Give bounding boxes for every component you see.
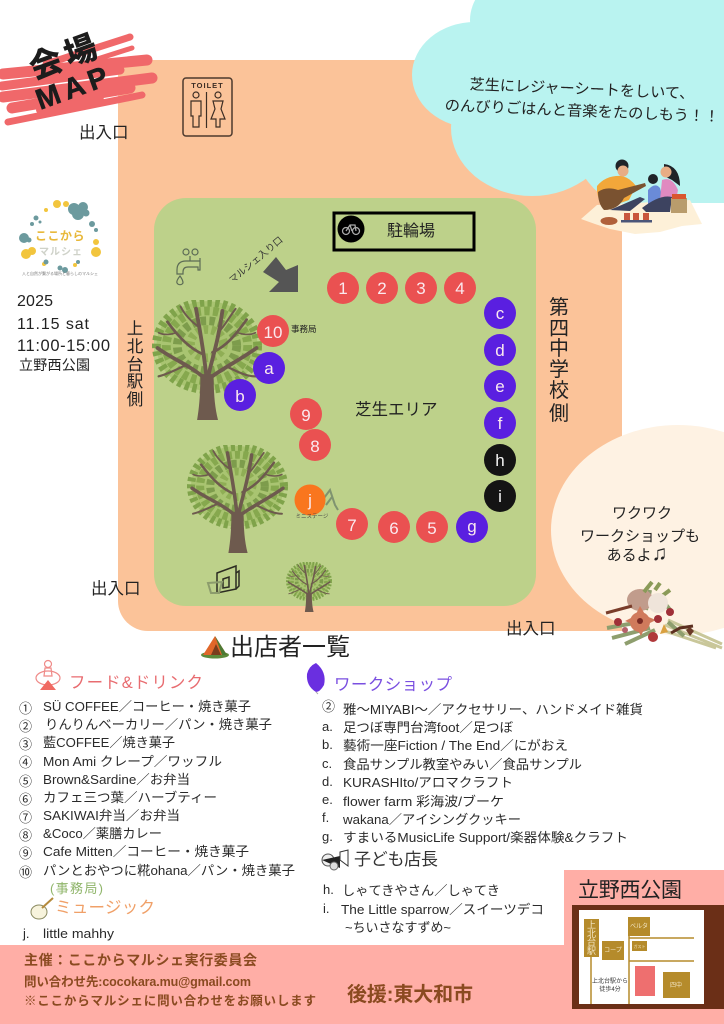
tree 1: [156, 301, 258, 420]
info bubble background: [551, 425, 724, 635]
food stall markers: 7: [347, 516, 357, 535]
logo: ここからマルシェ: 人と自然が繋がる場所と暮らしのマルシェ: [22, 270, 98, 276]
supporter: 後援:東大和市: [347, 983, 473, 1006]
map blocks: [584, 917, 690, 998]
workshop rows: KURASHIto/アロマクラフト: [343, 775, 513, 790]
info bubble text: あるよ♫: [607, 542, 667, 565]
icon: basketball hoop: [208, 566, 239, 593]
label: entrance top left: 出入口: [79, 123, 128, 142]
illustration: dried flower bouquet: [606, 582, 722, 648]
map labels: 駅: [587, 946, 596, 956]
icon: guitar: [31, 898, 53, 919]
workshop rows: c.: [322, 756, 332, 771]
tree 2: [191, 446, 284, 553]
heading: music: ミュージック: [55, 898, 155, 917]
organiser info: 主催：ここからマルシェ実行委員会: [24, 952, 257, 968]
panel: kids shop: i.: [323, 901, 330, 916]
panel: music: j.: [22, 926, 30, 941]
map labels: 台: [587, 936, 596, 947]
label: office: 事務局: [291, 324, 317, 334]
kids shop markers: h: [495, 451, 505, 470]
panel: food and drink: [19, 660, 295, 896]
vertical label: 上北台駅側: 駅: [127, 373, 143, 391]
logo: ここからマルシェ: [19, 200, 101, 276]
workshop rows: ②: [322, 699, 335, 714]
icon: toilet sign: [183, 78, 232, 136]
red brush strokes: [2, 37, 152, 122]
icon: purple leaf: [307, 663, 325, 694]
workshop rows: [322, 699, 643, 845]
event details: 2025: [17, 293, 53, 310]
food vendor rows: ③: [19, 737, 32, 752]
workshop rows: e.: [322, 792, 333, 807]
food stall markers: 6: [389, 519, 399, 538]
heading: kids shop: 子ども店長: [354, 850, 438, 869]
food stall markers: [257, 272, 476, 543]
title: 会場MAP with red brush: [2, 27, 152, 122]
food stall markers: 4: [455, 279, 465, 298]
panel: kids shop: ~ちいさなすずめ~: [345, 920, 451, 935]
panel: workshops: [307, 663, 643, 845]
workshop rows: 食品サンプル教室やみい／食品サンプル: [343, 757, 582, 772]
music marker: mini stage: j: [307, 491, 312, 510]
workshop markers: [224, 297, 516, 543]
food vendor rows: カフェ三つ葉／ハーブティー: [43, 790, 217, 805]
map labels: 徒歩4分: [599, 985, 621, 993]
panel: kids shop: The Little sparrow／スイーツデコ: [341, 902, 544, 917]
food vendor rows: [19, 699, 295, 896]
logo: ここからマルシェ: ここから: [35, 229, 85, 243]
title text: MAP: [32, 59, 117, 117]
organiser info: 問い合わせ先:cocokara.mu@gmail.com: [24, 974, 251, 989]
footer band: [0, 870, 724, 1024]
vertical label: 上北台駅側: 台: [127, 355, 143, 374]
workshop markers: d: [495, 341, 505, 360]
music marker: mini stage: [294, 484, 338, 520]
food stall markers: 5: [427, 519, 437, 538]
workshop markers: f: [498, 414, 503, 433]
food vendor rows: ⑤: [19, 774, 32, 789]
food vendor rows: ①: [19, 701, 32, 716]
arrow: entrance direction: [263, 257, 298, 292]
panel: music: little mahhy: [43, 926, 115, 941]
workshop rows: 雅～MIYABI～／アクセサリー、ハンドメイド雑貨: [343, 702, 643, 717]
organiser info: ※ここからマルシェに問い合わせをお願いします: [24, 993, 316, 1008]
heading: vendor list: 出店者一覧: [230, 634, 350, 661]
workshop markers: e: [495, 377, 505, 396]
food vendor rows: パンとおやつに糀ohana／パン・焼き菓子: [43, 863, 295, 878]
food vendor rows: Brown&Sardine／お弁当: [43, 772, 190, 787]
food stall markers: 3: [416, 279, 426, 298]
food vendor rows: りんりんベーカリー／パン・焼き菓子: [45, 717, 272, 732]
title text: 会場: [25, 27, 106, 86]
vertical label: 第四中学校側: 校: [549, 379, 569, 402]
vertical label: 第四中学校側: 学: [549, 358, 569, 381]
illustration: family picnic: [581, 160, 702, 234]
map park block: [635, 966, 655, 996]
food stall markers: 1: [338, 279, 348, 298]
food vendor rows: ②: [19, 719, 32, 734]
map title: 立野西公園: [578, 879, 682, 902]
workshop markers: g: [467, 517, 477, 536]
organiser info: [24, 952, 316, 1008]
lawn area: [154, 198, 536, 606]
workshop rows: flower farm 彩海波/ブーケ: [343, 794, 504, 809]
cloud message: のんびりごはんと音楽をたのしもう！！: [444, 97, 720, 126]
workshop markers: b: [235, 387, 245, 406]
icon: megaphone and kids: [322, 850, 348, 870]
info bubble text: ワークショップも: [580, 528, 700, 545]
icon: bicycle: [338, 216, 364, 242]
map labels: 上: [587, 920, 596, 930]
icon: tent: [201, 636, 229, 658]
label: lawn area: 芝生エリア: [355, 400, 438, 419]
workshop markers: c: [496, 304, 505, 323]
vertical label: 第四中学校側: 中: [549, 337, 569, 360]
food vendor rows: 藍COFFEE／焼き菓子: [43, 735, 175, 750]
map labels: [587, 920, 682, 993]
food stall markers: 2: [377, 279, 387, 298]
vertical label: 第四中学校側: 側: [549, 402, 569, 425]
speech cloud: [412, 0, 724, 212]
label: marche entrance: マルシェ入り口: [227, 235, 285, 286]
workshop rows: 藝術一座Fiction / The End／にがおえ: [343, 738, 568, 753]
food vendor rows: Mon Ami クレープ／ワッフル: [43, 754, 222, 769]
info bubble text: ワクワク: [612, 505, 672, 522]
food vendor rows: ④: [19, 755, 32, 770]
workshop rows: g.: [322, 829, 333, 844]
label: entrance bottom left: 出入口: [91, 579, 140, 598]
panel: kids shop: h.: [323, 882, 334, 897]
vertical label: 第四中学校側: 四: [549, 318, 569, 340]
workshop rows: すまいるMusicLife Support/楽器体験&クラフト: [343, 830, 628, 845]
food vendor rows: (事務局): [50, 881, 103, 896]
food vendor rows: SAKIWAI弁当／お弁当: [43, 808, 180, 823]
workshop rows: a.: [322, 719, 333, 734]
cloud message: 芝生にレジャーシートをしいて、: [469, 76, 695, 103]
vertical label: 上北台駅側: 北: [127, 337, 144, 356]
event details: 11:00-15:00: [17, 337, 110, 355]
map labels: 上北台駅から: [592, 977, 628, 985]
event details: 11.15 sat: [17, 316, 90, 333]
food vendor rows: ⑨: [19, 846, 32, 861]
event details: [17, 293, 110, 373]
info bubble text: [580, 505, 700, 565]
workshop rows: wakana／アイシングクッキー: [342, 812, 521, 827]
label: entrance bottom right: 出入口: [506, 619, 556, 638]
vertical label: 上北台駅側: 側: [127, 390, 143, 409]
tree 3: [288, 562, 330, 612]
workshop rows: f.: [322, 810, 329, 825]
icon: toilet sign: TOILET: [191, 81, 224, 90]
food vendor rows: ⑦: [19, 810, 32, 825]
bicycle parking box: 駐輪場: [387, 222, 435, 240]
icon: food figure: [36, 660, 60, 690]
food vendor rows: SÜ COFFEE／コーヒー・焼き菓子: [43, 699, 251, 714]
access map panel: [572, 879, 724, 1009]
workshop rows: 足つぼ専門台湾foot／足つぼ: [343, 720, 513, 735]
food stall markers: 9: [301, 406, 311, 425]
event details: 立野西公園: [19, 357, 90, 373]
map frame: [572, 905, 724, 1009]
kids shop markers: i: [498, 487, 502, 506]
panel: music: [22, 898, 155, 941]
food vendor rows: ⑩: [19, 865, 32, 880]
map labels: 北: [587, 929, 596, 939]
cloud message: [444, 75, 721, 126]
map labels: ガスト: [634, 943, 646, 949]
workshop markers: a: [264, 359, 274, 378]
food vendor rows: Cafe Mitten／コーヒー・焼き菓子: [43, 844, 249, 859]
vertical label: 第四中学校側: 第: [549, 296, 569, 319]
panel: kids shop: [322, 850, 544, 935]
map labels: 四中: [670, 981, 682, 989]
vertical label: 上北台駅側: 上: [127, 319, 143, 338]
map roads: [591, 936, 694, 1004]
food stall markers: 10: [264, 323, 282, 342]
food stall markers: 8: [310, 437, 320, 456]
title text: [25, 27, 117, 117]
heading: workshop: ワークショップ: [334, 675, 452, 694]
icon: water faucet: [177, 249, 200, 285]
bicycle parking box: [334, 213, 474, 250]
food vendor rows: ⑥: [19, 792, 32, 807]
panel: kids shop: しゃてきやさん／しゃてき: [342, 883, 500, 898]
music marker: mini stage: ミニステージ: [296, 513, 329, 520]
park ground: orange path area: [118, 60, 622, 631]
food vendor rows: &Coco／薬膳カレー: [43, 826, 162, 841]
map labels: ベルタ: [630, 922, 648, 930]
food vendor rows: ⑧: [19, 828, 32, 843]
workshop rows: d.: [322, 774, 333, 789]
workshop rows: b.: [322, 737, 333, 752]
heading: food: フード&ドリンク: [69, 673, 203, 692]
kids shop markers: [484, 444, 516, 512]
logo: ここからマルシェ: マルシェ: [39, 247, 83, 258]
map labels: コープ: [604, 947, 622, 954]
